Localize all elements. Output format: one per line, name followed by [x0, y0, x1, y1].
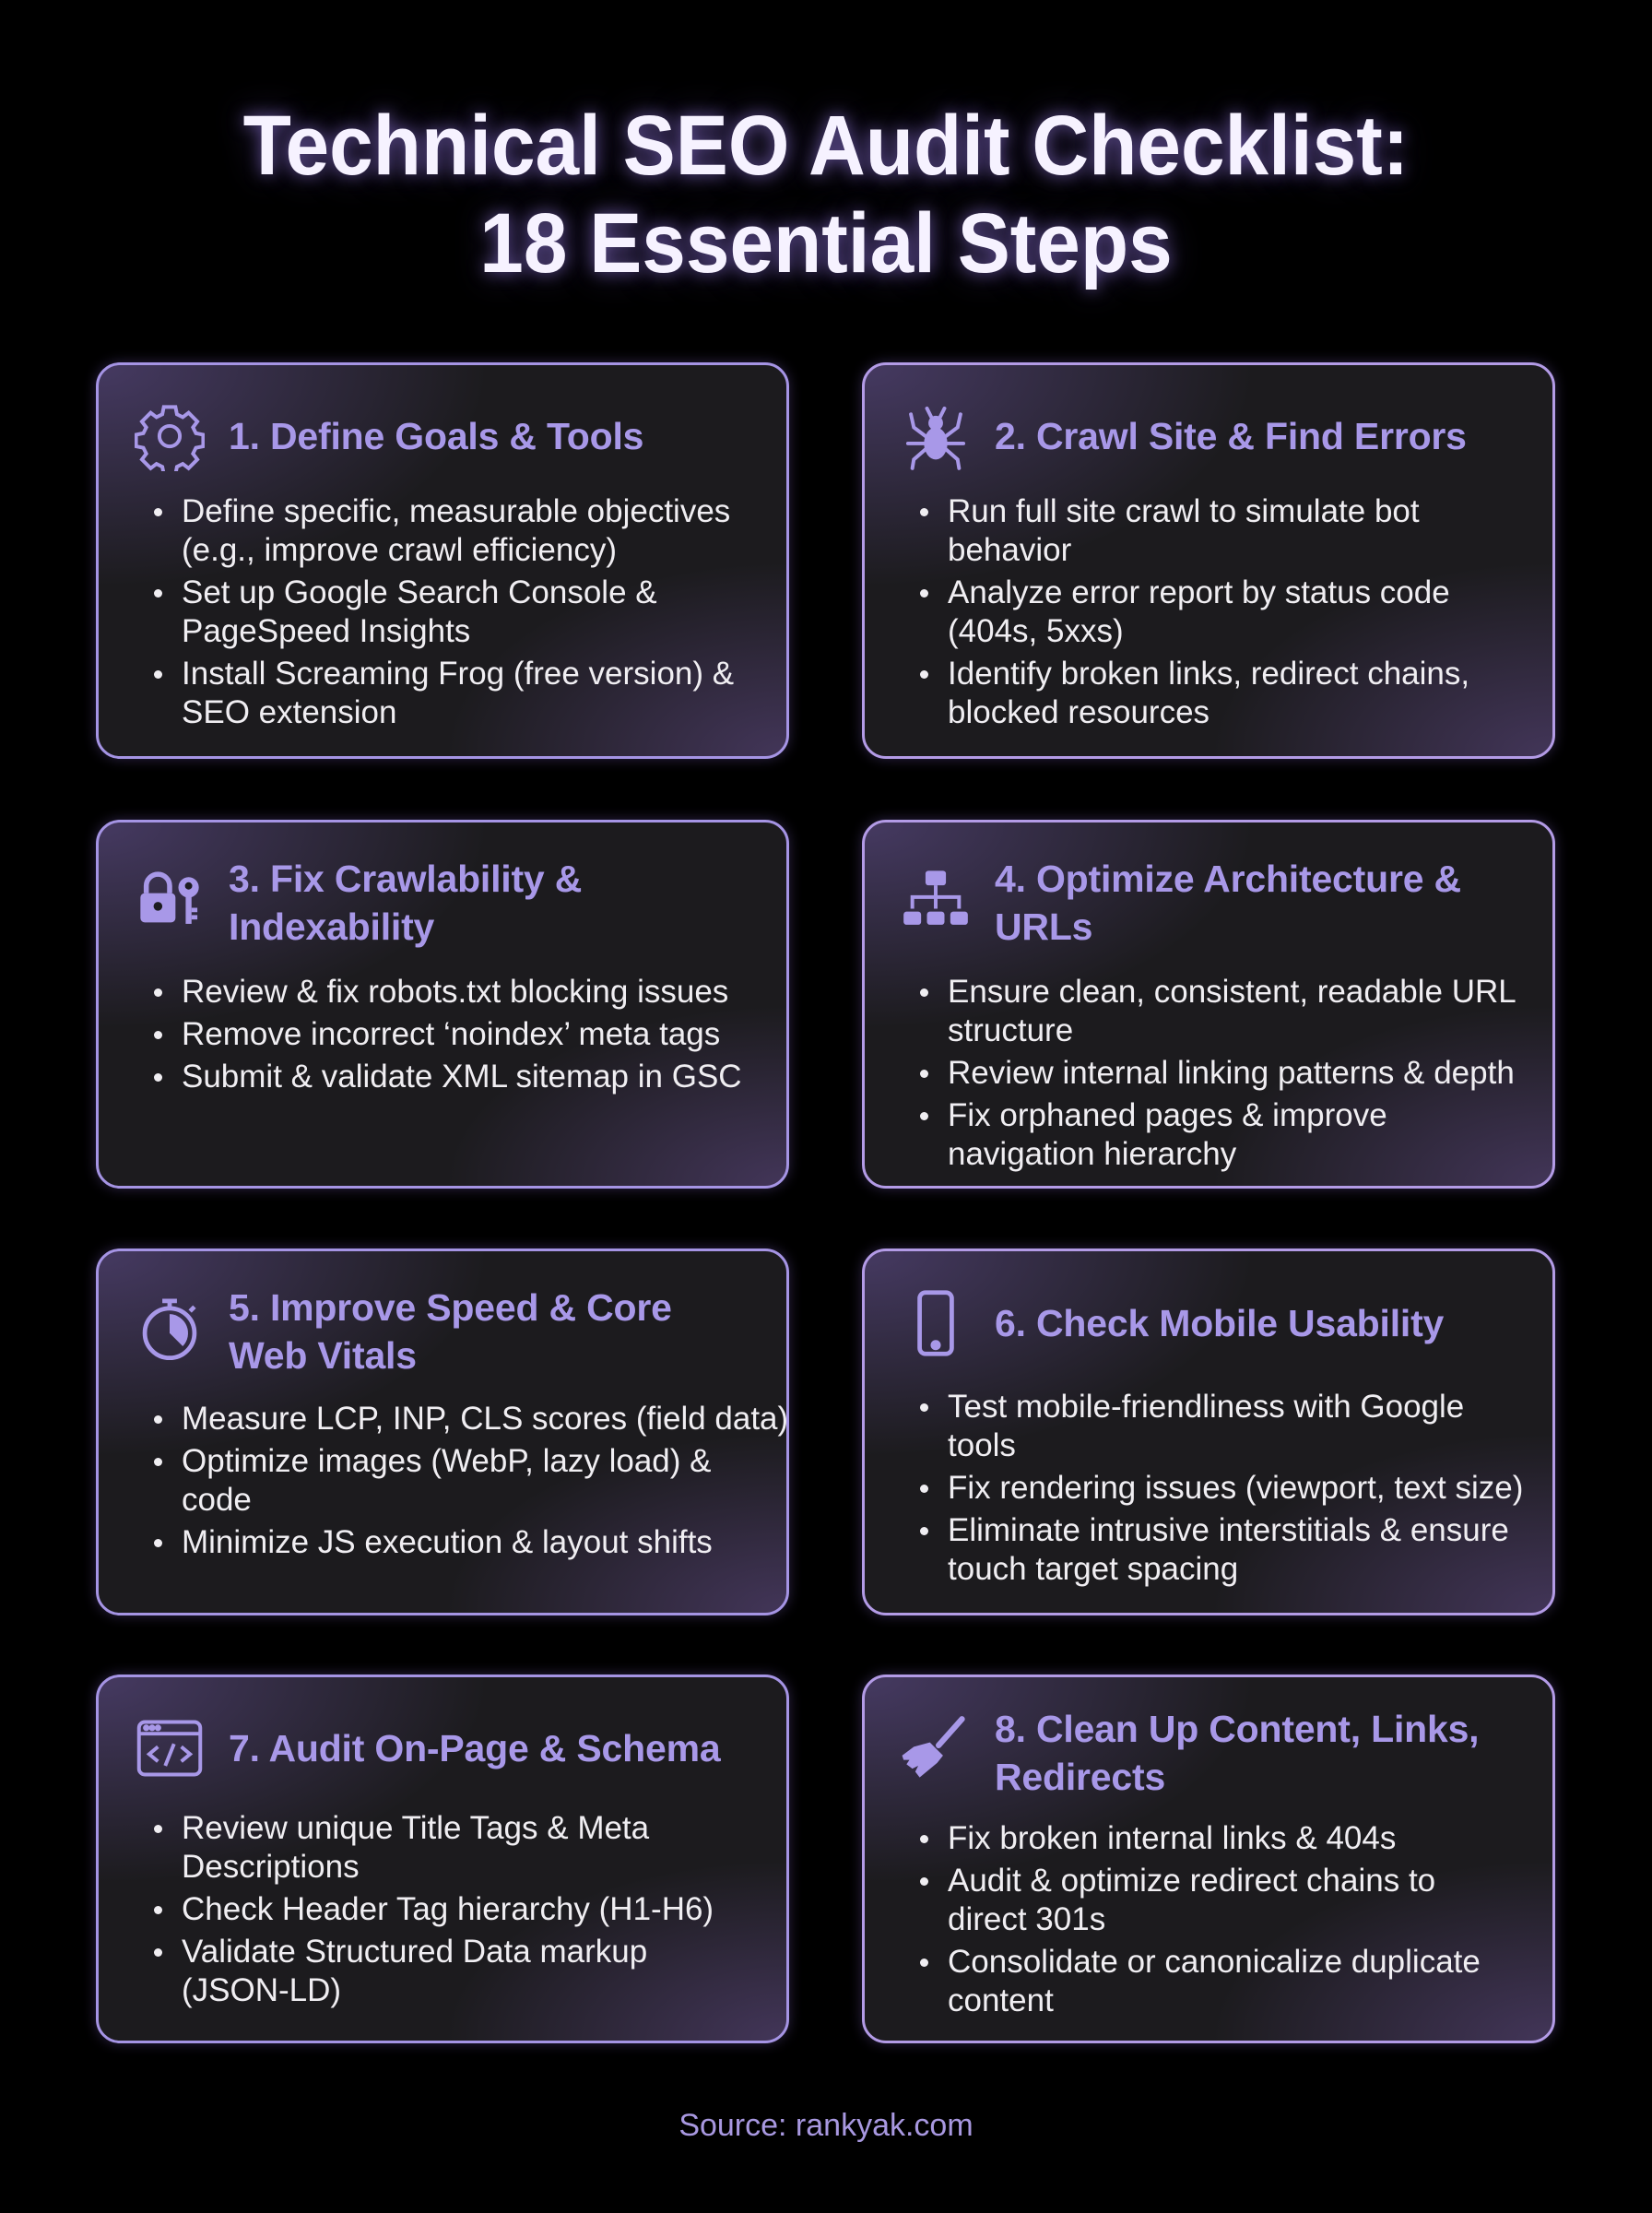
- bullets: Define specific, measurable objectives: [182, 493, 730, 529]
- heading: Indexability: [229, 905, 434, 948]
- bullets: structure: [948, 1012, 1073, 1048]
- bullets: Review unique Title Tags & Meta: [182, 1810, 649, 1846]
- bullets: content: [948, 1982, 1054, 2018]
- panel: step 5: [96, 1249, 789, 1615]
- bullets: Consolidate or canonicalize duplicate: [948, 1944, 1481, 1980]
- bullets: [154, 1810, 714, 2008]
- bullets: PageSpeed Insights: [182, 613, 470, 649]
- bullets: Measure LCP, INP, CLS scores (field data): [182, 1401, 788, 1437]
- bullets: Review internal linking patterns & depth: [948, 1055, 1515, 1091]
- panel: step 4: [862, 820, 1555, 1189]
- panel: step 6: [862, 1249, 1555, 1615]
- bullets: Optimize images (WebP, lazy load) &: [182, 1443, 712, 1479]
- bullets: Minimize JS execution & layout shifts: [182, 1524, 713, 1560]
- icon: code window: [136, 1721, 203, 1776]
- heading: Redirects: [995, 1756, 1165, 1798]
- bullets: Eliminate intrusive interstitials & ensure: [948, 1512, 1509, 1548]
- bullets: Validate Structured Data markup: [182, 1934, 647, 1970]
- panel: step 8: [862, 1675, 1555, 2043]
- bullets: navigation hierarchy: [948, 1136, 1236, 1172]
- bullets: [154, 1401, 788, 1560]
- heading: [229, 1286, 672, 1377]
- bullets: behavior: [948, 532, 1071, 568]
- heading: 7. Audit On-Page & Schema: [229, 1727, 720, 1769]
- bullets: [920, 493, 1469, 730]
- icon: gear: [135, 405, 205, 471]
- bullets: (JSON-LD): [182, 1972, 341, 2008]
- bullets: (404s, 5xxs): [948, 613, 1124, 649]
- heading: [995, 858, 1461, 948]
- icon: lock and key: [140, 871, 199, 924]
- bullets: Submit & validate XML sitemap in GSC: [182, 1059, 742, 1095]
- bullets: Set up Google Search Console &: [182, 574, 657, 610]
- bullets: [154, 974, 742, 1095]
- bullets: Review & fix robots.txt blocking issues: [182, 974, 728, 1010]
- bullets: Install Screaming Frog (free version) &: [182, 656, 734, 692]
- bullets: code: [182, 1482, 252, 1518]
- title: [232, 99, 1412, 301]
- panel: step 2: [862, 362, 1555, 759]
- heading: 5. Improve Speed & Core: [229, 1286, 672, 1329]
- bullets: [920, 974, 1516, 1172]
- bullets: [154, 493, 734, 730]
- icon: sitemap: [903, 870, 968, 925]
- bullets: (e.g., improve crawl efficiency): [182, 532, 617, 568]
- panel: step 7: [96, 1675, 789, 2043]
- bullets: direct 301s: [948, 1901, 1105, 1937]
- bullets: Analyze error report by status code: [948, 574, 1450, 610]
- heading: [995, 1708, 1479, 1798]
- bullets: Check Header Tag hierarchy (H1-H6): [182, 1891, 714, 1927]
- bullets: [920, 1389, 1523, 1587]
- bullets: Run full site crawl to simulate bot: [948, 493, 1420, 529]
- bullets: touch target spacing: [948, 1551, 1238, 1587]
- bullets: Fix rendering issues (viewport, text size): [948, 1470, 1523, 1506]
- heading: 4. Optimize Architecture &: [995, 858, 1461, 900]
- icon: stopwatch: [142, 1298, 197, 1360]
- bullets: blocked resources: [948, 694, 1210, 730]
- heading: 6. Check Mobile Usability: [995, 1302, 1444, 1344]
- bullets: SEO extension: [182, 694, 396, 730]
- bullets: Fix orphaned pages & improve: [948, 1097, 1387, 1133]
- bullets: Remove incorrect ‘noindex’ meta tags: [182, 1016, 720, 1052]
- heading: URLs: [995, 905, 1092, 948]
- bullets: Descriptions: [182, 1849, 360, 1885]
- icon: spider: [905, 406, 966, 470]
- heading: 2. Crawl Site & Find Errors: [995, 415, 1467, 457]
- panel: step 1: [96, 362, 789, 759]
- title: 18 Essential Steps: [479, 196, 1173, 290]
- bullets: Test mobile-friendliness with Google: [948, 1389, 1464, 1425]
- panel: step 3: [96, 820, 789, 1189]
- heading: 3. Fix Crawlability &: [229, 858, 582, 900]
- bullets: [920, 1820, 1481, 2018]
- source footer: Source: rankyak.com: [678, 2108, 974, 2143]
- bullets: Identify broken links, redirect chains,: [948, 656, 1469, 692]
- bullets: tools: [948, 1427, 1016, 1463]
- icon: broom: [902, 1716, 965, 1778]
- heading: 8. Clean Up Content, Links,: [995, 1708, 1479, 1750]
- bullets: Fix broken internal links & 404s: [948, 1820, 1396, 1856]
- heading: Web Vitals: [229, 1334, 417, 1377]
- bullets: Audit & optimize redirect chains to: [948, 1863, 1435, 1899]
- icon: phone: [917, 1290, 954, 1356]
- bullets: Ensure clean, consistent, readable URL: [948, 974, 1516, 1010]
- title: Technical SEO Audit Checklist:: [243, 99, 1409, 193]
- heading: [229, 858, 582, 948]
- heading: 1. Define Goals & Tools: [229, 415, 643, 457]
